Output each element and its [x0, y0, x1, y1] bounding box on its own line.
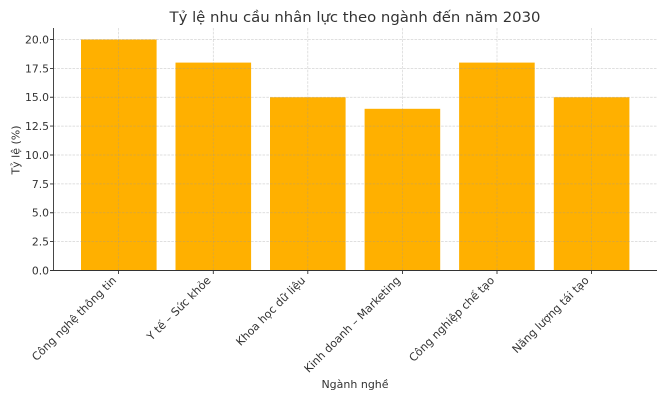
- bars: [81, 40, 629, 270]
- y axis tick labels: 15.0: [25, 91, 49, 104]
- y axis tick labels: 12.5: [25, 120, 49, 133]
- y axis tick labels: 5.0: [32, 207, 49, 220]
- y axis tick labels: 7.5: [32, 178, 49, 191]
- y axis tick labels: 10.0: [25, 149, 49, 162]
- y axis tick labels: 0.0: [32, 264, 49, 278]
- y axis tick labels: [25, 34, 49, 278]
- x axis category labels: Y tế – Sức khỏe: [144, 274, 214, 344]
- y axis tick labels: 17.5: [25, 62, 49, 75]
- x axis category labels: Công nghiệp chế tạo: [407, 274, 497, 365]
- x axis title: Ngành nghề: [321, 378, 389, 391]
- x axis category labels: Năng lượng tái tạo: [510, 274, 592, 356]
- y axis tick labels: 20.0: [25, 34, 49, 46]
- x axis category labels: [29, 274, 592, 375]
- y axis tick labels: 2.5: [32, 236, 49, 249]
- x axis category labels: Công nghệ thông tin: [29, 274, 119, 364]
- axes: [50, 28, 657, 274]
- title: Tỷ lệ nhu cầu nhân lực theo ngành đến năm 2030: [168, 9, 540, 26]
- x axis category labels: Khoa học dữ liệu: [234, 274, 308, 349]
- x axis category labels: Kinh doanh – Marketing: [302, 274, 403, 375]
- y axis title: Tỷ lệ (%): [10, 125, 22, 176]
